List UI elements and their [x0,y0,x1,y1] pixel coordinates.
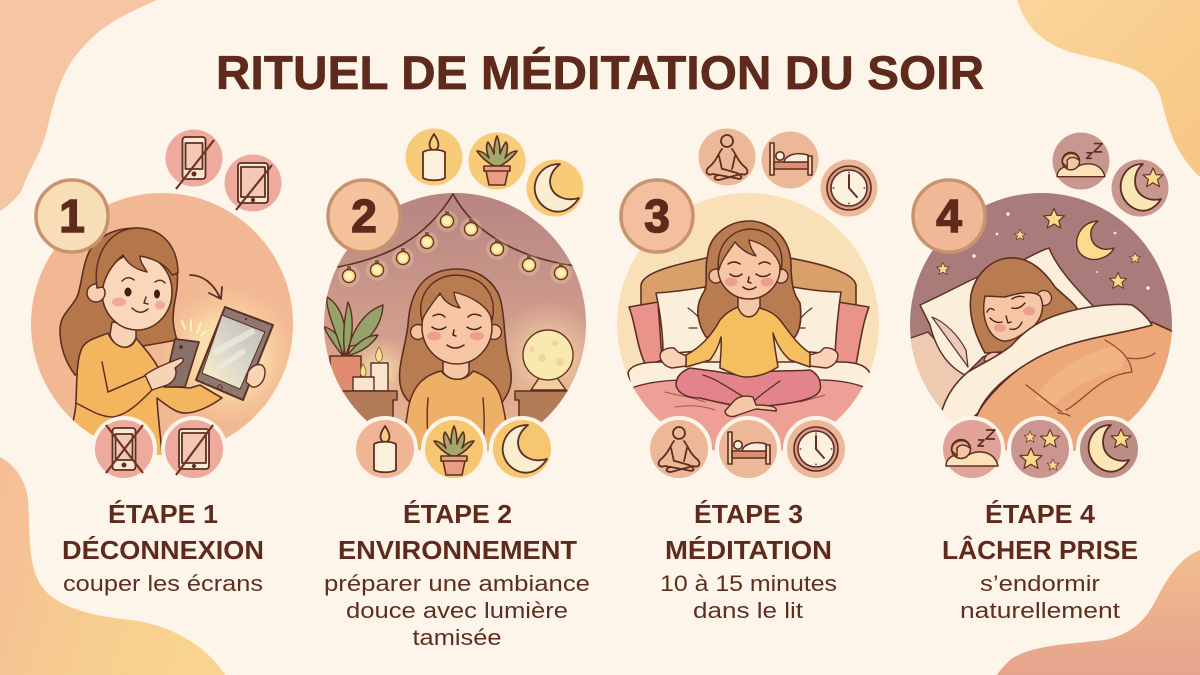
icon: moon top [526,160,584,216]
description: step 4: naturellement [960,598,1121,623]
blanket [960,322,1180,470]
stars [1044,208,1064,228]
white pillows [656,287,710,354]
badge: number 3: 3 [644,190,670,242]
candles [360,347,382,377]
icon: moon and star bottom [1078,418,1140,480]
plant [324,297,383,356]
panel: step 4 let go [905,132,1180,623]
icon: stars bottom [1009,418,1071,480]
panel: step 1 disconnect [30,130,306,596]
girl hair back [400,269,511,405]
back pillow [1010,248,1094,320]
hand [984,352,1002,368]
description: step 1: couper les écrans [63,571,263,596]
description: step 2: douce avec lumière [346,598,568,623]
panel: step 2 environment [320,128,603,650]
ear [1036,290,1052,306]
heading: environment: ENVIRONNEMENT [338,535,577,565]
sweater [72,333,222,470]
tablet [196,307,273,400]
heading: step 3: ÉTAPE 3 [694,499,803,529]
heading: step 2: ÉTAPE 2 [403,499,512,529]
legs [676,368,821,407]
badge: number 1 [36,180,108,252]
panel: step 3 meditation [612,128,885,623]
background blob: bottom left [0,457,225,675]
icon: sleeper top [1052,132,1110,190]
sweater [686,307,810,377]
icon: no phone bottom [93,418,155,480]
badge: number 3 [621,180,693,252]
screen sparks [182,320,206,336]
description: step 2: tamisée [412,625,502,650]
tables [342,390,398,422]
title: RITUEL DE MÉDITATION DU SOIR [216,46,984,100]
icon: bed bottom [717,418,779,480]
head [709,269,723,283]
sweater [405,370,506,451]
face [410,324,426,340]
bedding [628,362,870,392]
hair [970,258,1080,353]
background blob: top right [1017,0,1200,177]
icon: candle bottom [354,418,416,480]
icon: clock bottom [785,418,847,480]
arrow [190,275,222,299]
hands [660,348,838,368]
description: step 2 [324,571,590,650]
description: step 4 [960,571,1121,623]
badge: number 2 [328,180,400,252]
description: step 3: dans le lit [693,598,804,623]
hair back [60,228,177,375]
description: step 3 [660,571,837,623]
front pillow [920,275,1000,375]
cream fold [942,304,1152,440]
hand on phone [145,358,183,390]
badge: number 4 [913,180,985,252]
description: step 3: 10 à 15 minutes [660,571,837,596]
heading: disconnect: DÉCONNEXION [62,535,264,565]
icon: no tablet top [224,154,282,212]
icon: sleeper bottom [941,418,1003,480]
badge: number 1: 1 [59,190,85,242]
sky dots [972,212,1150,290]
illustration: girl meditating on bed [612,190,885,465]
heading: step 1: ÉTAPE 1 [108,499,218,529]
icon: plant top [468,132,526,190]
sheet [910,331,976,420]
hand on tablet [246,364,265,387]
badge: number 4: 4 [936,190,962,242]
description: step 4: s’endormir [980,571,1101,596]
illustration: girl in calm room with lights [324,193,586,451]
phone [164,339,199,387]
badge: number 2: 2 [351,190,377,242]
icon: bed top [762,132,818,188]
icon: candle top [406,128,462,186]
girl hair [698,221,801,337]
icon: meditation bottom [648,418,710,480]
heading: let go: LÂCHER PRISE [942,535,1138,565]
face [984,293,1042,341]
icon: moon bottom [491,418,553,480]
icon: no phone top [166,130,222,189]
description: step 2: préparer une ambiance [324,571,590,596]
background blob: top left [0,0,157,211]
icon: clock top [820,160,878,216]
neck [110,322,136,347]
icon: no tablet bottom [163,418,225,480]
icon: meditation top [698,128,756,186]
illustration: girl sleeping under starry sky [910,193,1172,451]
icon: plant bottom [423,418,485,480]
string lights [338,194,575,267]
illustration: girl with phone and tablet [31,193,293,455]
background blob: bottom right [997,550,1200,675]
icon: moon and star top [1112,160,1168,216]
headboard [641,258,856,305]
red pillows [629,302,662,366]
face [102,254,172,330]
heading: meditation: MÉDITATION [665,535,832,565]
heading: step 4: ÉTAPE 4 [985,499,1096,529]
moon [1077,221,1114,260]
feet [725,396,776,416]
moon lamp [530,378,567,390]
